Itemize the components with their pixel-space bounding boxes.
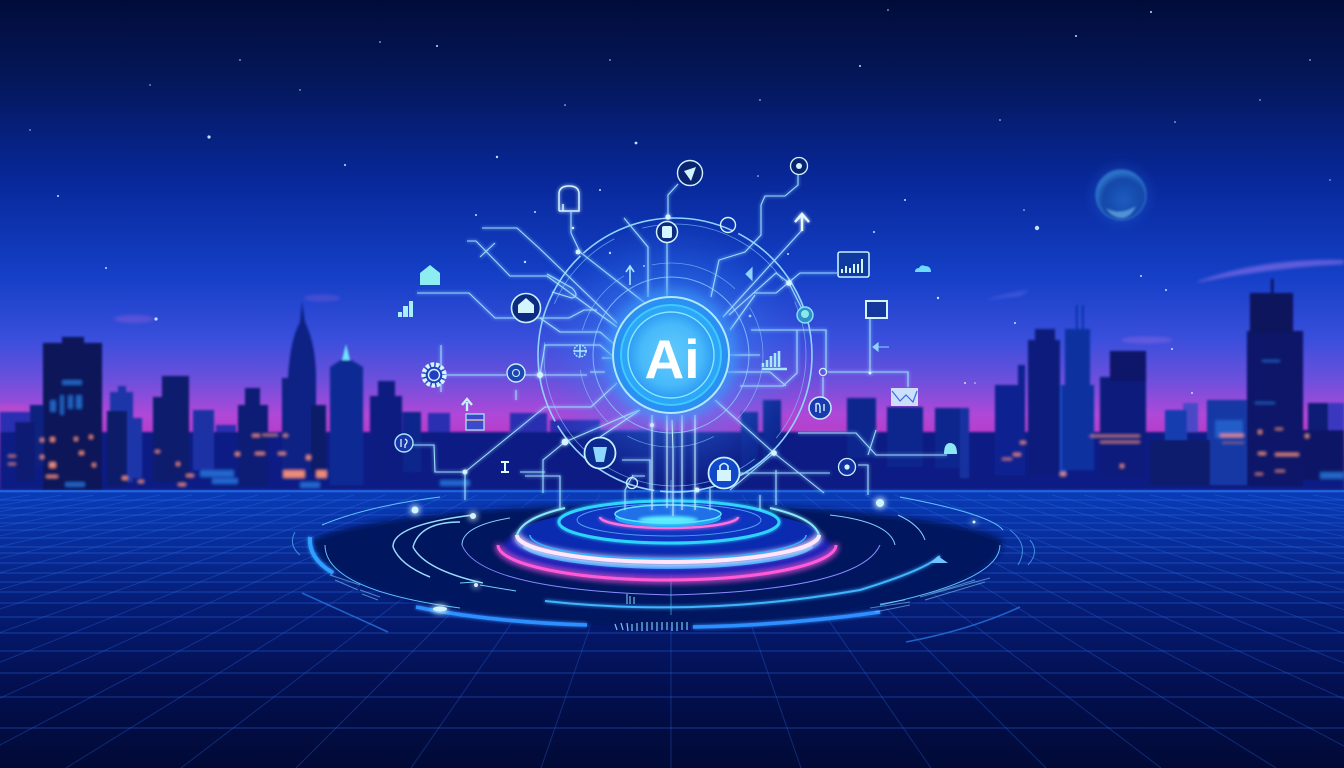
icon: arrow up [795, 214, 809, 231]
night sky background [0, 0, 1344, 500]
glowing floor dots [412, 499, 976, 612]
hologram halo [536, 220, 806, 490]
icon: bar chart panel [838, 252, 869, 277]
glow under magenta ring [502, 517, 832, 579]
ring tick marks [330, 575, 990, 631]
icon: bin in ring [584, 438, 616, 468]
outer rings [292, 480, 1035, 627]
icon: envelope [891, 388, 918, 406]
Ai label: Ai [644, 328, 700, 390]
icon: form box [466, 414, 484, 430]
tier: upper blue step [518, 508, 818, 562]
icon: ring lower right [809, 397, 831, 419]
city skyline [0, 279, 1344, 490]
AI network hologram [395, 158, 957, 516]
white-pink ring [517, 535, 819, 562]
icon: ring right [797, 307, 813, 323]
platform base [313, 504, 1003, 627]
icon: speaker marks [746, 268, 889, 351]
icon: signal bars [398, 301, 413, 317]
icon: monitor [866, 301, 887, 318]
lit windows [8, 360, 1344, 488]
icon: document in ring [656, 222, 678, 242]
icon: globe pin top [678, 160, 702, 186]
icon: cloud [915, 265, 931, 272]
icon: house [420, 265, 440, 285]
icon: open ring [720, 218, 736, 232]
small rings on traces [626, 368, 827, 488]
cyan ring [559, 501, 779, 543]
central emitter disc [615, 505, 721, 527]
icon: ring left [507, 364, 525, 382]
icon: arrow left [462, 399, 472, 411]
stars [29, 9, 1331, 394]
platform: concentric holographic rings [292, 480, 1035, 631]
icon: ring lower left [395, 434, 413, 452]
icon: bars next to core [762, 351, 787, 369]
main rings [538, 218, 812, 492]
AI core [605, 289, 737, 421]
icon: small arrow [626, 266, 634, 285]
tier: lower blue step [515, 511, 821, 569]
icon: gear [424, 364, 444, 386]
distant buildings [0, 403, 1344, 470]
low city band [0, 432, 1344, 490]
middle buildings [741, 398, 969, 472]
icon: gateway dome [559, 186, 579, 211]
inner magenta ring [600, 517, 738, 528]
icon: home in ring [512, 294, 540, 322]
clouds [0, 260, 1344, 412]
icon: ring far lower right [838, 458, 856, 476]
icon: i-beam [501, 462, 509, 472]
left buildings [15, 302, 421, 490]
reflective floor [0, 490, 1344, 768]
moon [1091, 165, 1151, 225]
floor grid [0, 491, 1344, 768]
right buildings [960, 279, 1344, 486]
icon: lock in ring [708, 458, 740, 488]
icon: top right node [790, 158, 808, 174]
circuit traces [413, 175, 947, 516]
network nodes [463, 214, 871, 492]
icon: small dome [944, 443, 957, 454]
magenta outer ring [498, 545, 836, 580]
icon: small globe [574, 345, 587, 357]
